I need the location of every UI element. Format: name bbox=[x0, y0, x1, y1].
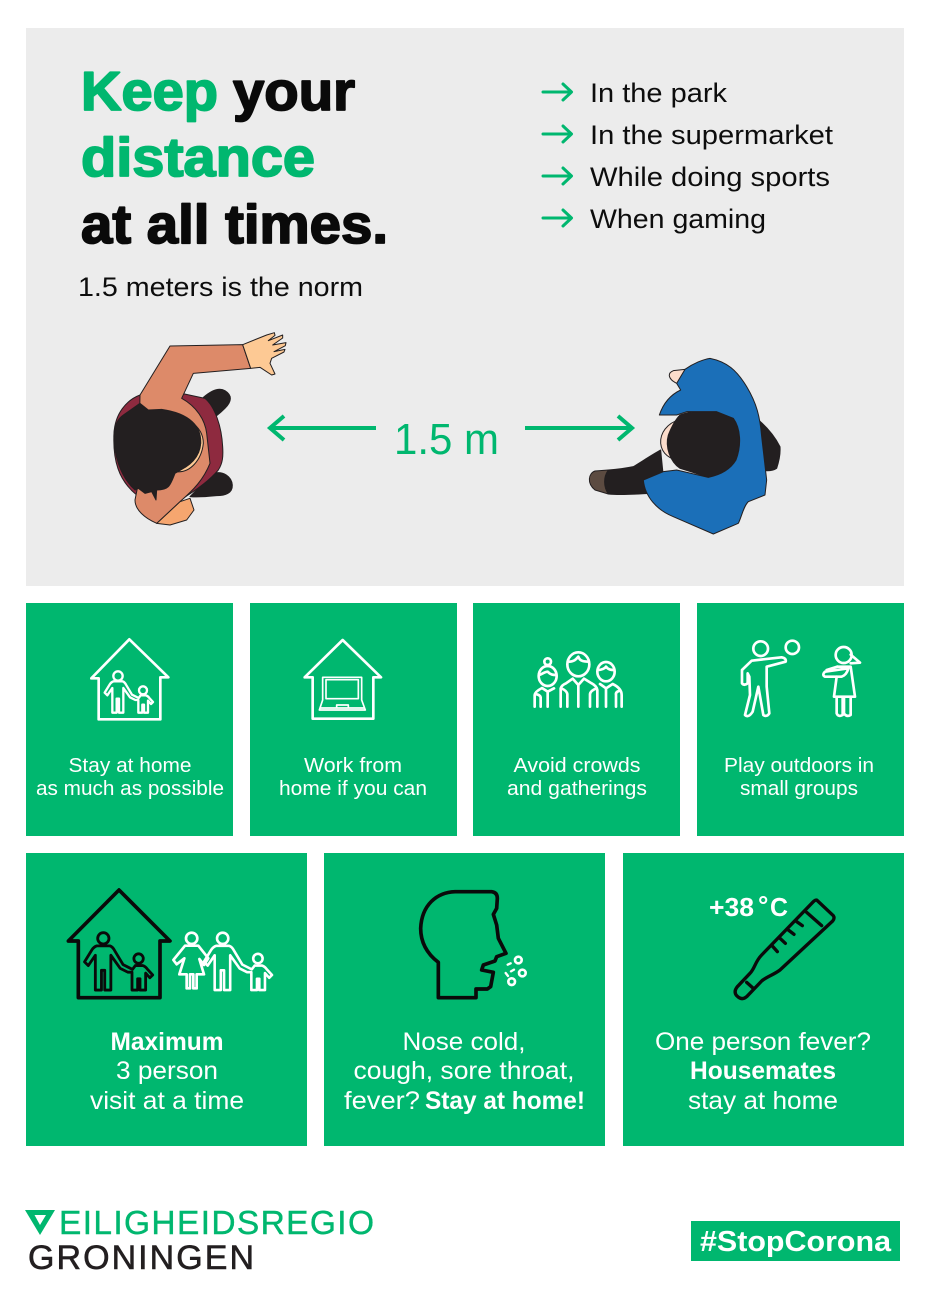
caption: as much as possible bbox=[36, 778, 224, 800]
icon: person right, seen from above bbox=[589, 358, 780, 534]
caption bbox=[724, 755, 874, 800]
caption bbox=[655, 1028, 871, 1115]
icon: house with family bbox=[91, 639, 168, 719]
caption: One person fever? bbox=[655, 1028, 871, 1056]
caption: home if you can bbox=[279, 778, 427, 800]
caption: Maximum bbox=[110, 1028, 224, 1056]
panel: play outdoors bbox=[697, 603, 904, 836]
icon: house with family and visitors bbox=[68, 890, 272, 998]
list item: When gaming bbox=[590, 204, 766, 234]
caption: cough, sore throat, bbox=[354, 1057, 574, 1085]
caption: small groups bbox=[740, 778, 858, 800]
logo: Veiligheidsregio Groningen: EILIGHEIDSREGIO bbox=[59, 1205, 374, 1242]
caption bbox=[507, 755, 647, 800]
caption: stay at home bbox=[688, 1087, 838, 1115]
arrow: right bbox=[525, 416, 632, 440]
title: Keep bbox=[81, 60, 218, 122]
list item: While doing sports bbox=[590, 162, 830, 192]
title: at all times. bbox=[81, 193, 388, 255]
caption: and gatherings bbox=[507, 778, 647, 800]
caption: Avoid crowds bbox=[514, 755, 640, 777]
temperature label: C bbox=[770, 892, 788, 922]
caption: visit at a time bbox=[90, 1087, 244, 1115]
panel: avoid crowds bbox=[473, 603, 680, 836]
list of situations bbox=[543, 78, 834, 234]
icon: group of people bbox=[535, 652, 622, 707]
temperature label: ° bbox=[758, 890, 768, 920]
list item: In the supermarket bbox=[590, 120, 834, 150]
caption bbox=[279, 755, 427, 800]
title: distance bbox=[81, 126, 315, 188]
icon: house with laptop bbox=[305, 640, 381, 719]
list item: In the park bbox=[590, 78, 728, 108]
logo: Veiligheidsregio Groningen: GRONINGEN bbox=[28, 1239, 254, 1277]
title bbox=[81, 60, 388, 255]
icon: arrow bbox=[543, 126, 572, 142]
title: your bbox=[233, 60, 355, 122]
icon: coughing head bbox=[421, 892, 526, 998]
panel: symptoms bbox=[324, 853, 605, 1146]
panel: work from home bbox=[250, 603, 457, 836]
icon: arrow bbox=[543, 168, 572, 184]
logo: Veiligheidsregio Groningen bbox=[25, 1205, 374, 1277]
caption bbox=[36, 755, 224, 800]
caption: 3 person bbox=[116, 1057, 218, 1085]
temperature label: +38 bbox=[709, 892, 754, 922]
caption: Housemates bbox=[690, 1057, 836, 1085]
icon: arrow bbox=[543, 84, 572, 100]
caption: Stay at home bbox=[68, 755, 192, 777]
subtitle: 1.5 meters is the norm bbox=[78, 272, 363, 302]
caption: Nose cold, bbox=[402, 1028, 526, 1056]
icon: person left, seen from above bbox=[114, 333, 286, 525]
caption: Stay at home! bbox=[425, 1087, 585, 1115]
arrow: left bbox=[270, 416, 376, 440]
hashtag badge: #StopCorona bbox=[700, 1226, 892, 1258]
temperature label bbox=[709, 890, 788, 922]
caption: fever? bbox=[344, 1087, 420, 1115]
icon: thermometer bbox=[735, 900, 834, 999]
caption: Play outdoors in bbox=[724, 755, 874, 777]
hashtag badge bbox=[691, 1221, 900, 1261]
panel: keep your distance bbox=[26, 28, 904, 586]
icon: children playing with ball bbox=[742, 641, 860, 716]
panel: stay at home bbox=[26, 603, 233, 836]
icon: logo triangle bbox=[25, 1210, 55, 1235]
icon: arrow bbox=[543, 210, 572, 226]
panel: maximum visitors bbox=[26, 853, 307, 1146]
panel: fever bbox=[623, 853, 904, 1146]
caption: Work from bbox=[304, 755, 402, 777]
caption bbox=[90, 1028, 244, 1115]
distance label: 1.5 m bbox=[394, 415, 499, 464]
caption bbox=[344, 1028, 585, 1115]
